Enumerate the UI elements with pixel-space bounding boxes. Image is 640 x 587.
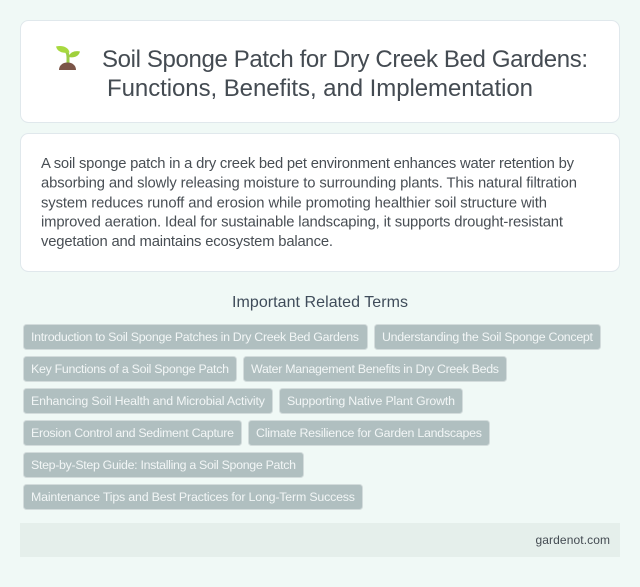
icon: seedling <box>56 46 80 70</box>
description text: improved aeration. Ideal for sustainable landscaping, it supports drought-resistant <box>41 214 563 230</box>
tag: maintenance: Maintenance Tips and Best Practices for Long-Term Success <box>31 490 355 504</box>
description text: absorbing and slowly releasing moisture to surrounding plants. This natural filtration <box>41 176 577 192</box>
tag: water management <box>244 356 506 382</box>
tag: key functions <box>24 356 236 382</box>
tag: climate resilience <box>248 420 490 446</box>
tag: soil health <box>24 388 272 414</box>
tag: climate resilience: Climate Resilience for Garden Landscapes <box>256 426 482 440</box>
description text: system reduces runoff and erosion while promoting healthier soil structure with <box>41 196 547 212</box>
panel: description <box>20 134 620 272</box>
tag: introduction <box>24 324 368 350</box>
footer: gardenot.com <box>536 533 610 547</box>
description text <box>41 156 577 250</box>
tag: introduction: Introduction to Soil Sponge Patches in Dry Creek Bed Gardens <box>31 330 359 344</box>
title: Soil Sponge Patch for Dry Creek Bed Gardens: <box>102 46 588 73</box>
heading: related terms: Important Related Terms <box>232 294 408 311</box>
description text: vegetation and maintains ecosystem balance. <box>41 234 333 250</box>
tag: step-by-step: Step-by-Step Guide: Installing a Soil Sponge Patch <box>31 458 296 472</box>
header panel <box>20 20 620 122</box>
description text: A soil sponge patch in a dry creek bed pet environment enhances water retention by <box>41 156 575 172</box>
tag: step-by-step <box>24 452 304 478</box>
title: Functions, Benefits, and Implementation <box>107 75 533 102</box>
tag: key functions: Key Functions of a Soil Sponge Patch <box>31 362 229 376</box>
tag: water management: Water Management Benefits in Dry Creek Beds <box>251 362 499 376</box>
tag: soil health: Enhancing Soil Health and Microbial Activity <box>31 394 266 408</box>
tag: concept: Understanding the Soil Sponge Concept <box>382 330 594 344</box>
tag: native plants: Supporting Native Plant Growth <box>287 394 455 408</box>
tag list <box>24 324 600 510</box>
tag: maintenance <box>24 484 362 510</box>
tag: native plants <box>280 388 462 414</box>
tag: concept <box>374 324 600 350</box>
tag: erosion control: Erosion Control and Sediment Capture <box>31 426 234 440</box>
title <box>102 46 588 102</box>
footer <box>20 523 620 557</box>
tag: erosion control <box>24 420 242 446</box>
